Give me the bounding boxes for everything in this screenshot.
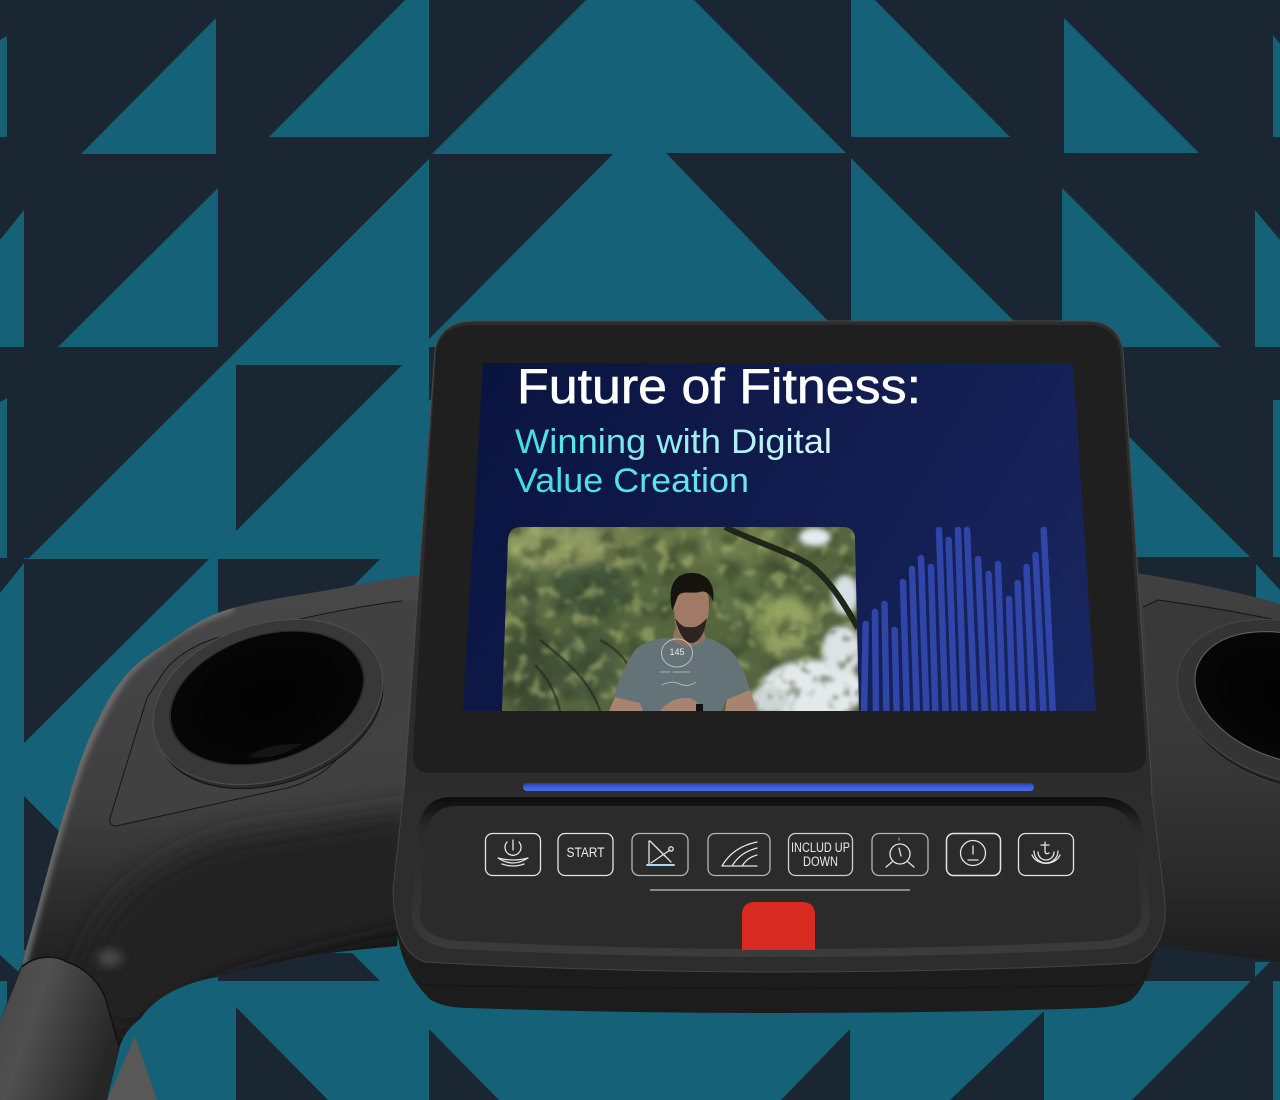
button: incline triangle [632,834,688,876]
cup holder right [1156,591,1280,816]
button: anchor arcs [1018,834,1074,876]
right handlebar arm with cup holder [1130,572,1280,962]
cup holder panel left [110,600,420,826]
display glass [413,325,1146,773]
smartwatch HUD readout [660,639,696,686]
button: power [486,834,540,876]
upper plate [393,780,1165,972]
control buttons [486,834,1074,876]
photo: man checking smartwatch under trees [500,523,864,720]
smartwatch HUD readout: 145 [669,647,685,657]
light bar [523,783,1034,791]
button: incline up down [788,834,852,876]
screen subtitle [514,423,832,500]
screen frame [404,321,1152,790]
screen subtitle: Winning with Digital [515,423,832,461]
button: incline up down: DOWN [803,854,838,869]
button: alert circle [946,834,1000,876]
button: incline up down: INCLUD UP [791,840,850,855]
arm body [0,575,420,1100]
man [609,573,757,711]
screen title: Future of Fitness: [517,360,921,414]
lower shell [397,925,1161,1013]
left handlebar arm with cup holder [0,575,420,1100]
recessed control panel [412,797,1150,957]
button: clock [872,834,928,876]
tube collar [0,957,119,1100]
display screen [463,360,1096,720]
back leg [107,1036,157,1100]
bar chart on screen [864,530,1053,716]
cup holder left [132,591,404,816]
button: speed arcs [708,834,770,876]
screen subtitle: Value Creation [514,462,749,500]
red safety button [742,902,815,950]
button: start [558,834,613,876]
button: start: START [566,844,605,860]
treadmill console body [393,321,1165,1013]
divider line [650,889,910,891]
